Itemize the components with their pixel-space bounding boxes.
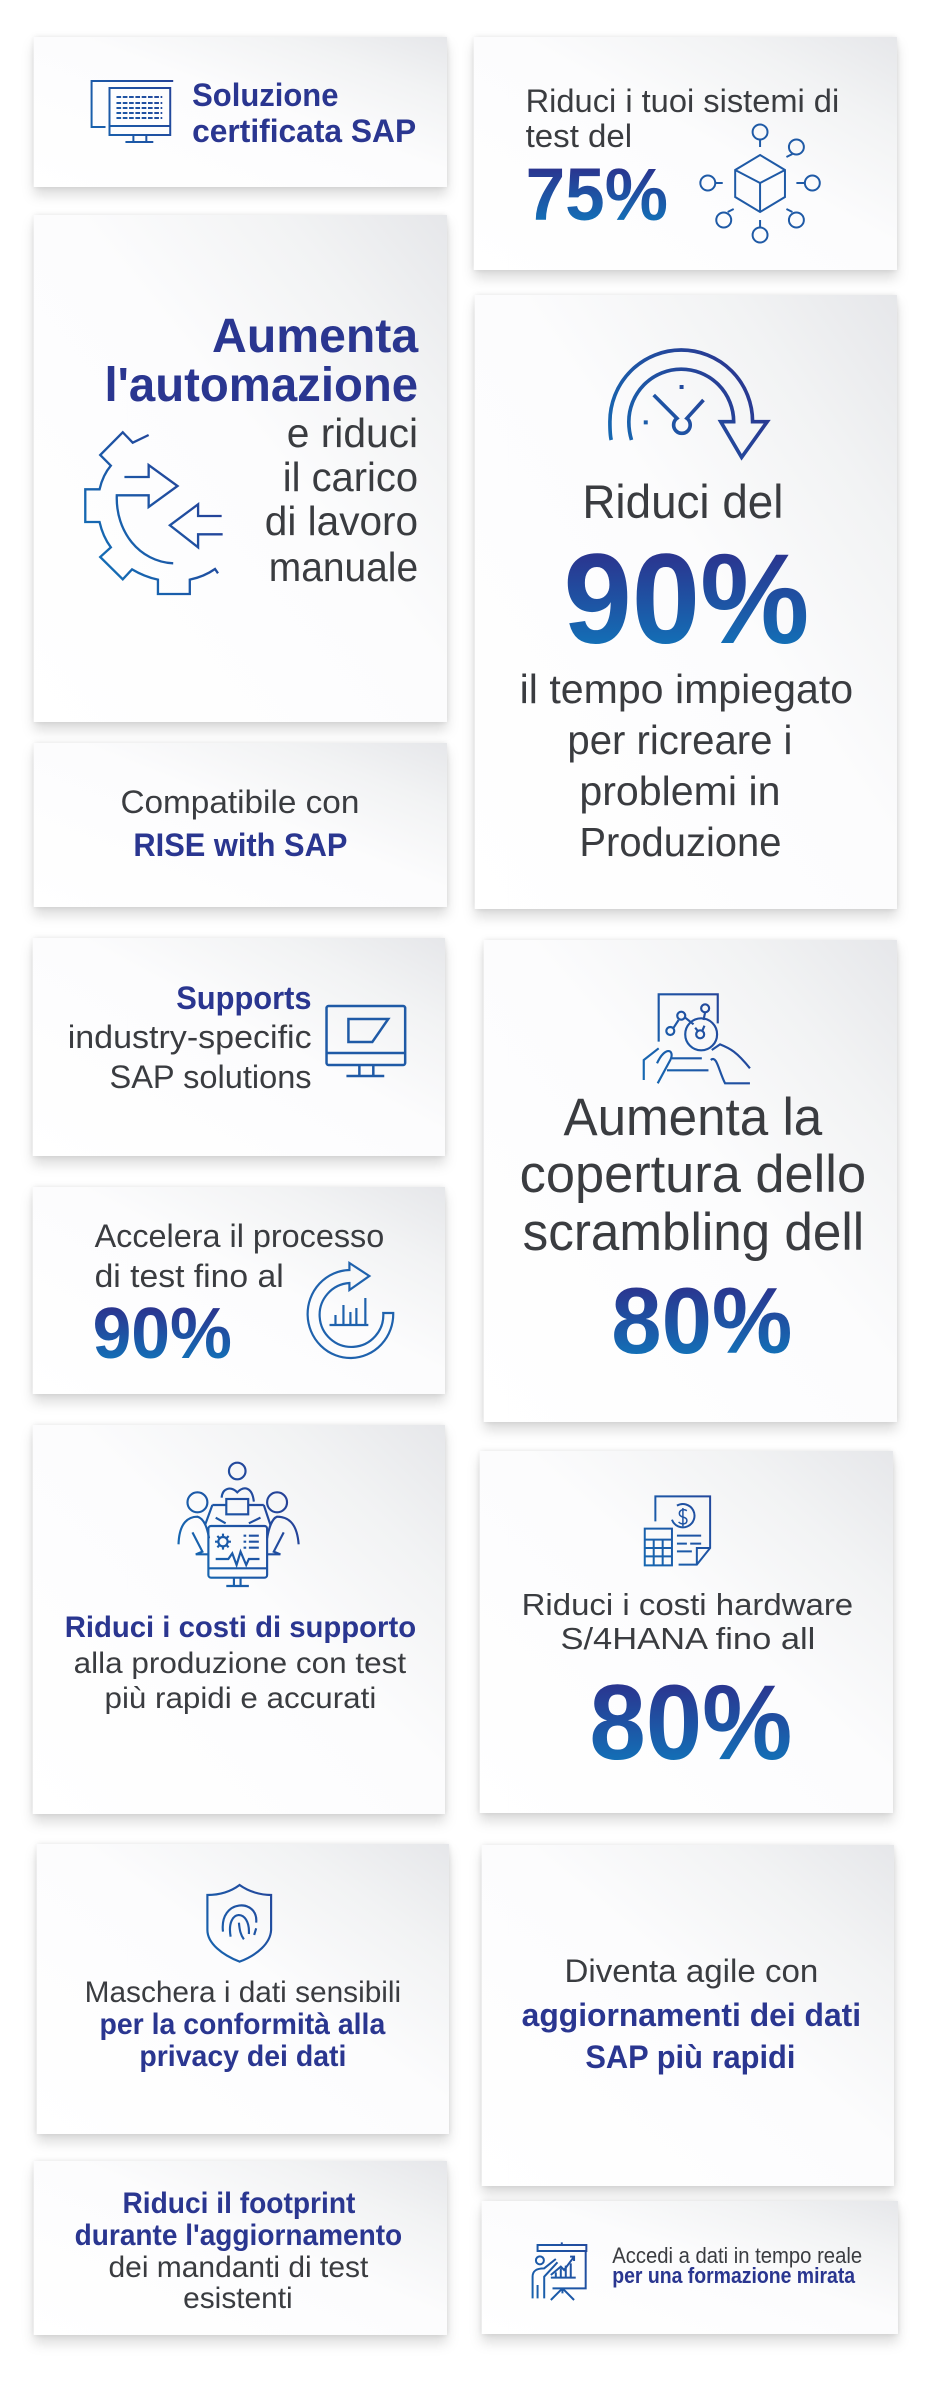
text: supports industry solutions: SAP solutions <box>110 1059 312 1095</box>
icon: refresh chart <box>308 1263 393 1358</box>
text: supports industry solutions <box>68 980 312 1095</box>
text: reduce footprint <box>75 2187 402 2315</box>
text: time to recreate production problems: problemi in <box>579 768 780 814</box>
text: accelerate testing: di test fino al <box>95 1258 284 1294</box>
text: reduce support costs <box>65 1611 416 1715</box>
panel: industry-specific solutions <box>33 938 445 1156</box>
panel: RISE with SAP <box>34 743 447 907</box>
text: reduce hardware costs: Riduci i costi hardware <box>522 1587 853 1622</box>
text: compatible with RISE: RISE with SAP <box>133 827 347 863</box>
icon: monitor with code <box>92 81 173 142</box>
text: reduce manual workload: manuale <box>269 544 418 590</box>
text: supports industry solutions: Supports <box>176 980 312 1016</box>
panel: reduce support costs <box>33 1425 445 1814</box>
text: mask sensitive data: per la conformità alla <box>100 2008 386 2041</box>
panel: accelerate testing <box>33 1187 445 1394</box>
text: reduce footprint: durante l'aggiornamento <box>75 2219 402 2252</box>
text: agile data refresh: aggiornamenti dei dati <box>522 1997 861 2033</box>
text: reduce by: Riduci del <box>582 476 783 528</box>
text: time to recreate production problems: Produzione <box>579 819 781 865</box>
panel: become agile <box>482 1845 894 2186</box>
heading: increase automation <box>105 310 418 412</box>
panel: reduce hardware costs <box>480 1451 893 1813</box>
text: reduce manual workload: e riduci <box>287 410 418 456</box>
text: reduce support costs: più rapidi e accurati <box>105 1682 376 1715</box>
stat: 80%: 80% <box>589 1662 792 1782</box>
text: reduce test systems: Riduci i tuoi sistemi di <box>526 83 839 119</box>
icon: team around monitor <box>179 1463 299 1586</box>
heading: certified solution: Soluzione <box>192 77 338 113</box>
panel: increase scrambling coverage <box>484 940 897 1422</box>
text: accelerate testing: Accelera il processo <box>95 1218 384 1254</box>
icon: gear with arrows <box>85 432 223 594</box>
heading: certified solution: certificata SAP <box>192 113 416 149</box>
text: reduce footprint: Riduci il footprint <box>122 2187 355 2220</box>
text: reduce manual workload: il carico <box>283 454 418 500</box>
heading: increase automation: l'automazione <box>105 359 418 412</box>
text: time to recreate production problems: per ricreare i <box>567 717 792 763</box>
text: time to recreate production problems: il tempo impiegato <box>520 666 853 712</box>
text: mask sensitive data: Maschera i dati sensibili <box>85 1976 401 2009</box>
text: real-time data for training: per una formazione mirata <box>612 2263 856 2288</box>
icon: clock with arrow <box>610 350 767 457</box>
icon: cube network <box>700 124 820 242</box>
icon: invoice and calculator <box>645 1496 710 1565</box>
text: reduce support costs: Riduci i costi di supporto <box>65 1611 416 1644</box>
text: increase scrambling coverage: Aumenta la <box>563 1088 823 1147</box>
heading: increase automation: Aumenta <box>212 310 418 363</box>
text: reduce manual workload <box>265 410 418 590</box>
panel: reduce test systems <box>474 37 897 270</box>
text: increase scrambling coverage <box>520 1088 866 1262</box>
icon: presenter with chart board <box>533 2242 586 2300</box>
text: agile data refresh: SAP più rapidi <box>585 2039 795 2075</box>
text: agile data refresh <box>522 1953 861 2075</box>
text: increase scrambling coverage: scrambling dell <box>523 1203 864 1262</box>
panel: reduce reproduction time <box>475 295 897 909</box>
text: increase scrambling coverage: copertura dello <box>520 1145 866 1204</box>
panel: mask sensitive data <box>37 1844 449 2134</box>
text: compatible with RISE <box>120 784 359 863</box>
text: reduce support costs: alla produzione con test <box>74 1647 407 1680</box>
stat: 75%: 75% <box>526 153 668 236</box>
panel: reduce footprint <box>34 2161 447 2335</box>
text: real-time data for training: Accedi a dati in tempo reale <box>612 2243 862 2268</box>
text: reduce footprint: dei mandanti di test <box>109 2251 369 2284</box>
heading: certified solution <box>192 77 416 149</box>
text: compatible with RISE: Compatibile con <box>120 784 359 820</box>
text: real-time data for training <box>612 2243 862 2288</box>
panel: real-time data for training <box>482 2201 898 2334</box>
text: supports industry solutions: industry-specific <box>68 1019 312 1055</box>
text: reduce footprint: esistenti <box>183 2282 293 2315</box>
text: reduce hardware costs: S/4HANA fino all <box>560 1621 815 1656</box>
text: mask sensitive data: privacy dei dati <box>139 2040 346 2073</box>
text: reduce test systems: test del <box>526 118 632 154</box>
text: reduce test systems <box>526 83 839 154</box>
text: reduce hardware costs <box>522 1587 853 1656</box>
text: mask sensitive data <box>85 1976 401 2073</box>
text: reduce manual workload: di lavoro <box>265 498 418 544</box>
stat: 90%: 90% <box>93 1294 232 1374</box>
text: time to recreate production problems <box>520 666 853 865</box>
stat: 80%: 80% <box>611 1268 792 1373</box>
stat: 90%: 90% <box>563 528 809 671</box>
icon: monitor <box>327 1006 405 1076</box>
panel: increase automation <box>34 215 447 722</box>
icon: shield with fingerprint <box>207 1885 271 1962</box>
icon: hands holding tablet with magnifier <box>644 994 750 1083</box>
text: accelerate testing <box>95 1218 384 1294</box>
text: agile data refresh: Diventa agile con <box>564 1953 818 1989</box>
panel: certified SAP solution <box>34 37 447 187</box>
